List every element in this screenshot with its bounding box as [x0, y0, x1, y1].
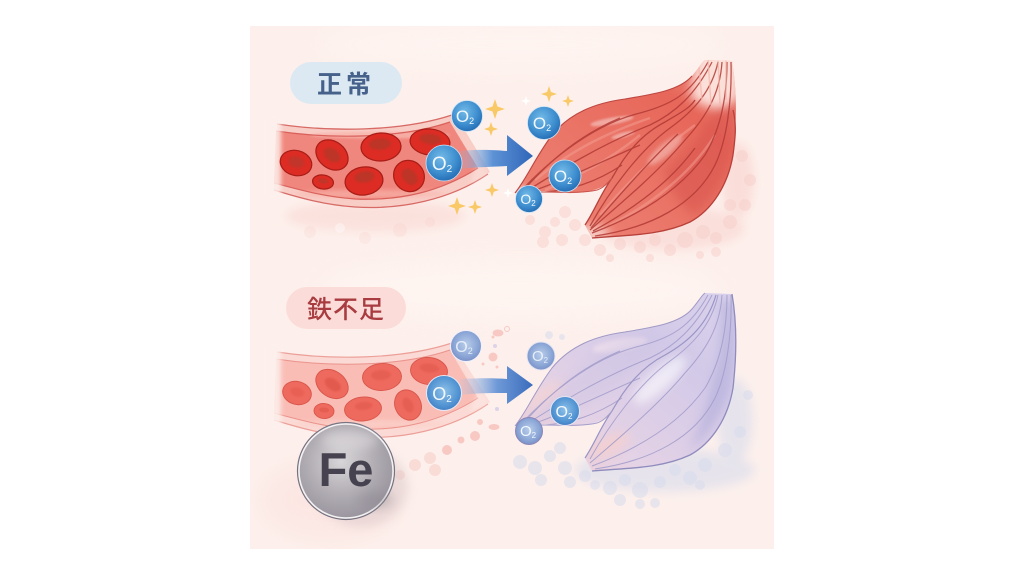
O2 bubbles: O: [554, 167, 567, 186]
O2 bubbles: 2: [546, 123, 551, 133]
O2 bubbles, faded: O: [455, 339, 468, 356]
O2 bubbles: [426, 100, 581, 212]
blotches under muscle: [513, 331, 755, 509]
red blood cells, pale: [280, 356, 449, 425]
O2 bubbles, faded: 2: [532, 431, 537, 440]
O2 bubbles, faded: 2: [468, 346, 473, 356]
O2 bubbles, faded: 2: [446, 394, 452, 405]
sparkles: [448, 86, 574, 215]
O2 bubbles, faded: O: [532, 348, 544, 365]
label pill: iron deficiency: 鉄不足: [307, 296, 385, 324]
O2 bubbles, faded: O: [432, 384, 446, 404]
scattered pink particles: [395, 326, 510, 480]
infographic: [250, 26, 774, 549]
O2 bubbles: O: [456, 107, 469, 126]
muscle: [514, 60, 736, 239]
O2 bubbles, faded: [426, 330, 580, 444]
O2 bubbles: 2: [567, 176, 572, 186]
arrow: [460, 135, 533, 176]
red blood cells: [277, 127, 451, 198]
O2 bubbles: 2: [447, 164, 453, 175]
pink wash under vessel: [285, 200, 465, 244]
O2 bubbles: O: [432, 154, 447, 175]
O2 bubbles, faded: O: [556, 404, 568, 421]
O2 bubbles: 2: [531, 199, 536, 208]
panel: normal state: [266, 50, 756, 262]
blood vessel, pale: [266, 343, 490, 438]
blood vessel: [266, 114, 490, 208]
label pill: iron deficiency: [286, 287, 406, 329]
iron coin: Fe: [319, 443, 373, 496]
label pill: normal: [290, 62, 402, 104]
muscle, pale: [515, 293, 736, 471]
panel: iron deficiency state: [266, 287, 755, 527]
iron coin: [298, 422, 408, 527]
O2 bubbles: O: [533, 114, 546, 133]
O2 bubbles, faded: 2: [568, 412, 573, 421]
panel: background: [250, 20, 774, 549]
label pill: normal: 正常: [317, 71, 375, 99]
O2 bubbles, faded: O: [520, 423, 532, 440]
arrow: [460, 366, 533, 404]
O2 bubbles: O: [520, 191, 531, 207]
O2 bubbles, faded: 2: [544, 356, 549, 365]
blotches under muscle: [525, 142, 756, 262]
O2 bubbles: 2: [469, 116, 474, 126]
